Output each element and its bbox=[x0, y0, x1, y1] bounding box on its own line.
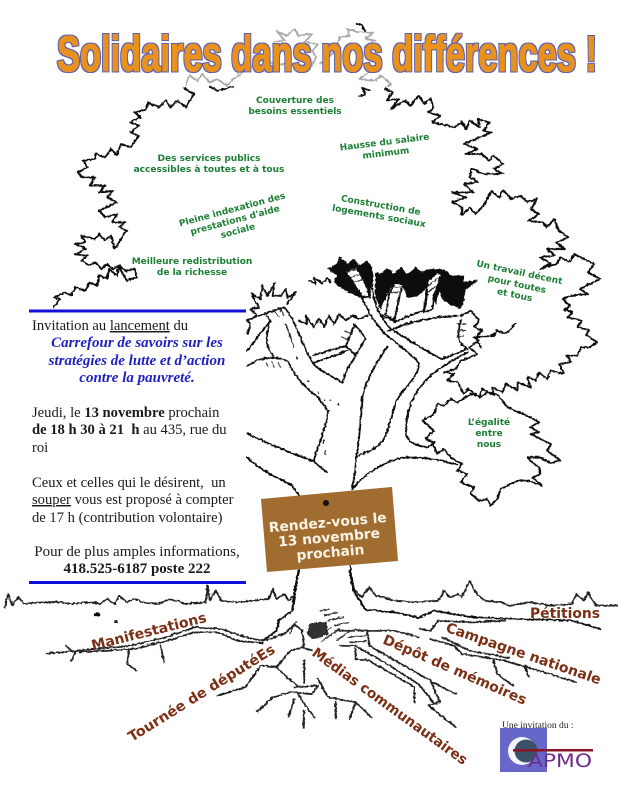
label: egalite: entre bbox=[475, 429, 503, 439]
middle twig line bbox=[298, 313, 367, 327]
label: redistribution: Meilleure redistribution bbox=[132, 257, 252, 267]
logo name: APMO bbox=[528, 750, 592, 772]
panel: invitation bbox=[29, 310, 246, 584]
label: pleine indexation: Pleine indexation des bbox=[178, 191, 287, 229]
black foliage left bbox=[327, 257, 372, 297]
date and place: de 18 h 30 à 21 h bbox=[32, 422, 139, 438]
label: travail decent: Un travail décent bbox=[475, 258, 564, 287]
top rule bbox=[29, 310, 246, 312]
label: salaire minimum: Hausse du salaire bbox=[339, 133, 430, 153]
root label: tournee: Tournée de députéEs bbox=[126, 642, 278, 745]
root labels bbox=[90, 606, 603, 768]
tree trunk and crown detail bbox=[247, 257, 597, 590]
invitation caption: Une invitation du : bbox=[502, 721, 574, 731]
bark marks bbox=[285, 323, 338, 453]
supper note: Ceux et celles qui le désirent, un bbox=[32, 475, 226, 491]
label: egalite: nous bbox=[477, 440, 501, 450]
root label: depot: Dépôt de mémoires bbox=[380, 632, 529, 709]
label: couverture: besoins essentiels bbox=[248, 107, 342, 117]
date and place: 13 novembre prochain bbox=[84, 405, 219, 421]
ground and roots bbox=[4, 570, 618, 728]
tree canopy outline bbox=[53, 23, 599, 310]
black foliage right bbox=[375, 267, 477, 308]
label: egalite: L’égalité bbox=[468, 417, 510, 428]
event name: Carrefour de savoirs sur les bbox=[51, 335, 223, 351]
branches bbox=[258, 307, 365, 383]
intro line: Invitation au lancement du bbox=[32, 318, 189, 334]
supper note: souper bbox=[32, 492, 71, 508]
sign text: Rendez-vous le bbox=[268, 510, 387, 536]
root label: manifestations: Manifestations bbox=[90, 610, 208, 654]
label: redistribution: de la richesse bbox=[157, 268, 227, 278]
label: travail decent: pour toutes bbox=[487, 274, 547, 296]
logo globe bbox=[514, 740, 538, 762]
sign board bbox=[261, 487, 398, 572]
bottom rule bbox=[29, 581, 246, 584]
label: travail decent: et tous bbox=[496, 287, 533, 304]
label: logements sociaux: logements sociaux bbox=[331, 204, 426, 230]
logo: APMO bbox=[500, 721, 593, 772]
canopy labels bbox=[132, 96, 564, 450]
root label: petitions: Pétitions bbox=[530, 606, 600, 622]
small crown: egalite bbox=[422, 392, 560, 505]
date and place: au 435, rue du bbox=[139, 422, 227, 438]
sign: rendez-vous bbox=[261, 487, 398, 572]
logo crescent bbox=[508, 737, 536, 765]
logo square bbox=[500, 728, 547, 772]
label: pleine indexation: sociale bbox=[220, 222, 256, 241]
label: salaire minimum: minimum bbox=[362, 146, 410, 162]
root label: campagne: Campagne nationale bbox=[444, 620, 603, 688]
label: couverture: Couverture des bbox=[256, 96, 334, 106]
supper note: de 17 h (contribution volontaire) bbox=[32, 510, 223, 526]
label: services publics: Des services publics bbox=[158, 154, 260, 164]
contact: 418.525-6187 poste 222 bbox=[63, 561, 211, 577]
date and place: roi bbox=[32, 440, 48, 456]
sign text: prochain bbox=[296, 542, 365, 564]
date and place: Jeudi, le bbox=[32, 405, 84, 421]
right twig bbox=[460, 310, 482, 347]
event name: stratégies de lutte et d’action bbox=[48, 353, 225, 369]
contact: Pour de plus amples informations, bbox=[34, 544, 240, 560]
sign nail bbox=[323, 500, 329, 506]
hatched upper branches bbox=[344, 267, 368, 297]
supper note: vous est proposé à compter bbox=[71, 492, 234, 508]
label: logements sociaux: Construction de bbox=[340, 194, 421, 218]
label: services publics: accessibles à toutes et à tous bbox=[134, 165, 284, 175]
hatched branch tips bbox=[263, 308, 467, 367]
label: pleine indexation: prestations d'aide bbox=[189, 204, 281, 238]
event name: contre la pauvreté. bbox=[79, 370, 195, 386]
left twig crown bbox=[247, 283, 295, 333]
right crown lower edge bbox=[443, 308, 597, 397]
panel background bbox=[29, 311, 246, 582]
root label: medias: Médias communautaires bbox=[309, 645, 470, 768]
sign text: 13 novembre bbox=[278, 526, 381, 551]
logo bar bbox=[513, 749, 593, 752]
